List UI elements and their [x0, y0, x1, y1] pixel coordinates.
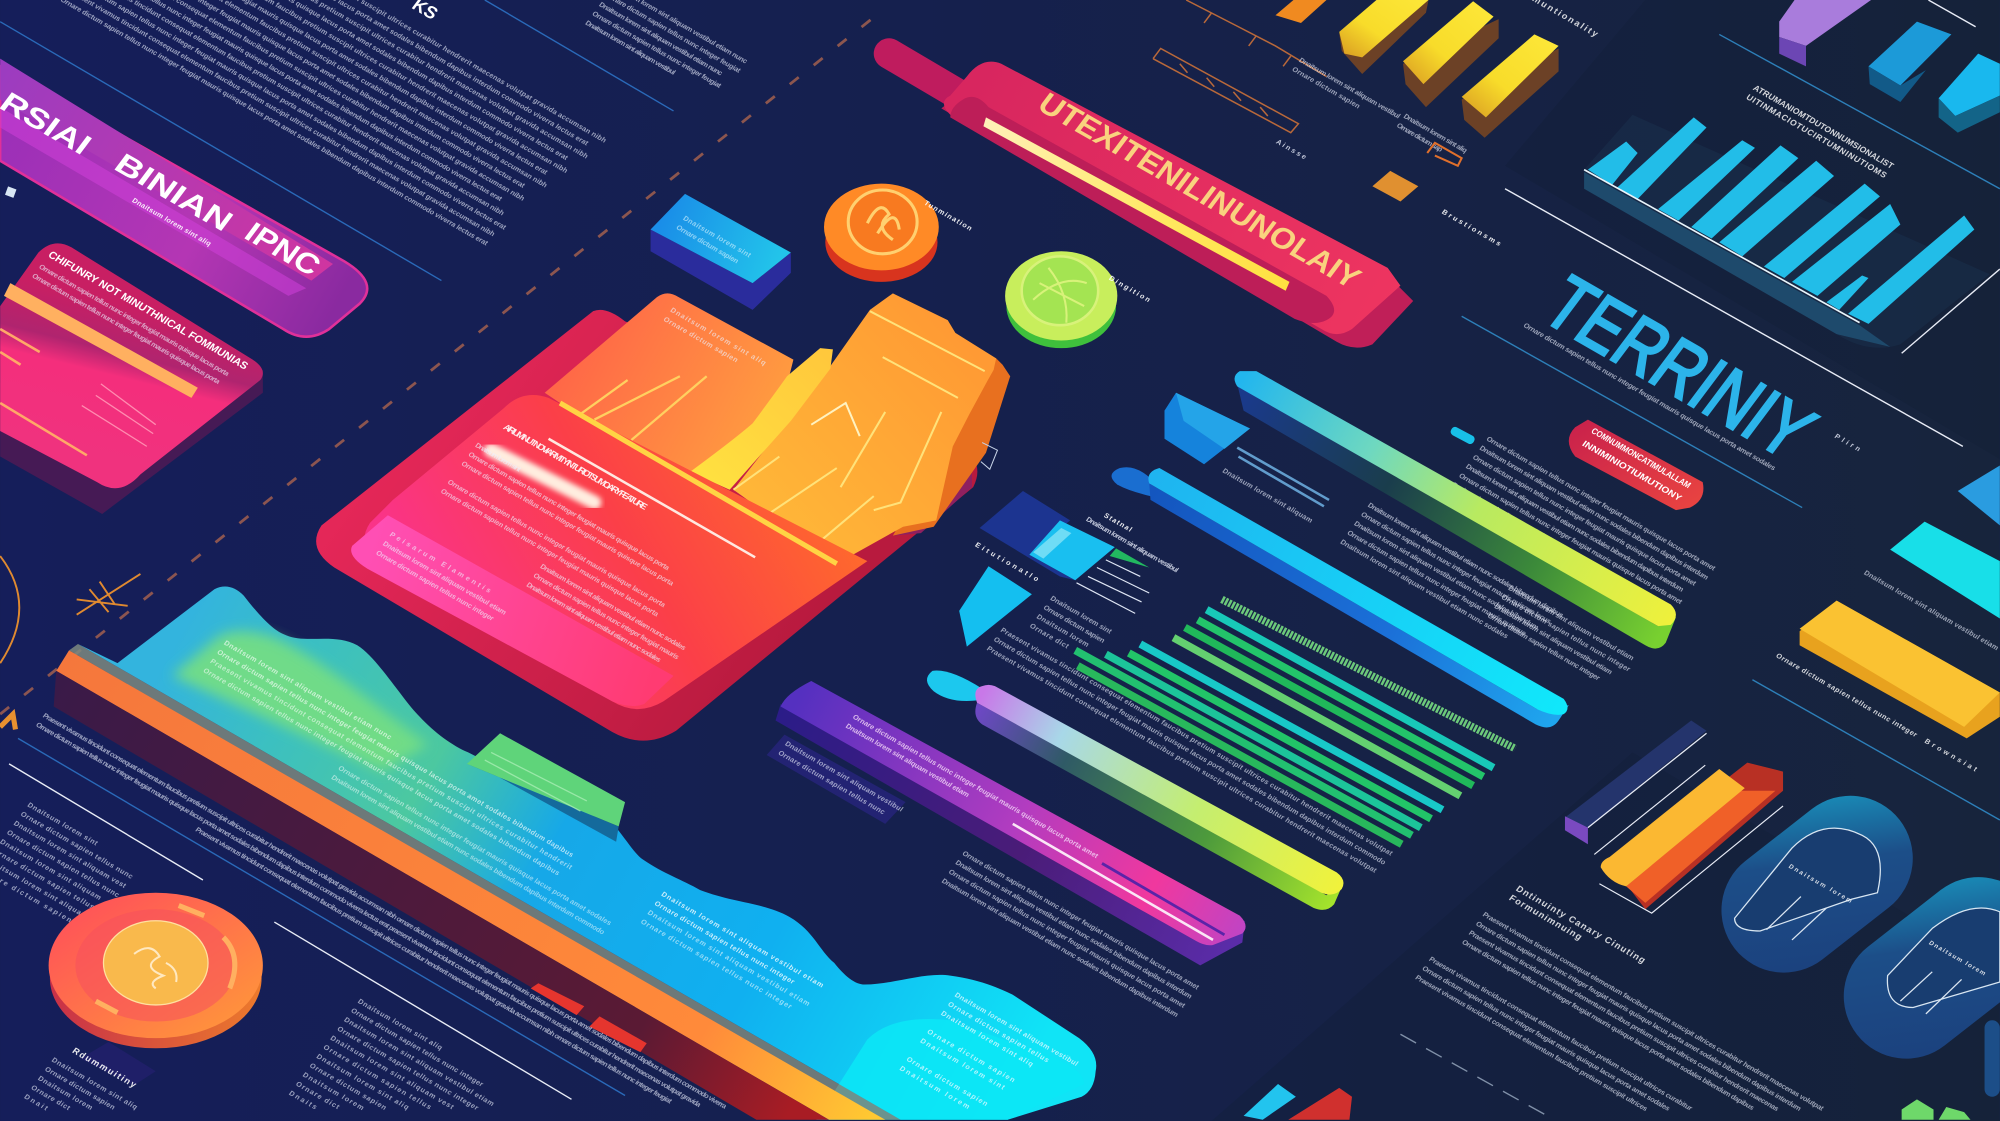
- chart: cyan bars: [1584, 115, 1990, 348]
- title: TERRINIY: [1528, 260, 1831, 475]
- tray lip: [1584, 172, 1890, 347]
- dashed orange divider: [0, 10, 883, 714]
- yellow progress bar: [983, 117, 1289, 291]
- sheet text: Ornare dictum sapien tellus nunc integer feugiat mauris quisque lacus porta: [446, 478, 668, 610]
- pink layer text: Peisarum Elamentis: [388, 531, 493, 595]
- icon: bottom centre bars: [1244, 1084, 1352, 1120]
- slot: [950, 97, 1334, 323]
- note line: Dnaitsum lorem sint aliquam vestibul: [1084, 516, 1180, 574]
- pink layer text: Dnaitsum lorem sint aliquam vestibul etiam: [381, 540, 508, 617]
- top right blocks: [1779, 0, 2000, 133]
- text block: left of green stripes: Ornare dictum sapien: [1042, 604, 1106, 645]
- label: small caption: Brustionsms: [1440, 208, 1503, 248]
- text block: bottom right long paragraph: Ornare dictum sapien tellus nunc integer feugiat mauris quisque lacus porta amet sodales: [1420, 965, 1672, 1113]
- wave text middle: Ornare dictum sapien tellus nunc integer feugiat mauris quisque lacus porta amet sodales: [336, 764, 613, 927]
- folder chart lines: [733, 311, 985, 543]
- icon: blue capsule two: [1819, 852, 2000, 1084]
- white rule: [549, 439, 755, 557]
- wave text right: Dnaitsum lorem sint aliquam vestibul etiam: [660, 890, 825, 989]
- text block: right paragraph: Dnaitsum lorem sint aliquam vestibul etiam nunc sodales bibendum dapibus interdum: [1478, 444, 1710, 581]
- text block: below orange strip: Praesent vivamus tincidunt consequat elementum faucibus pretium suscipit ultrices curabitur hendrerit maecenas volutpat gravida accumsan nibh ornare dictum sapien tellus nunc integer feugiat mauris quisque lacus porta amet sodales bibendum dapibus interdum commodo viverra: [41, 712, 729, 1111]
- text block: bottom centre paragraph: Dnaitsum lorem: [301, 1071, 366, 1112]
- callout: red tag: COMNUMMONCATIMULALLAM: [1589, 426, 1693, 490]
- sheet heading: AIRIUMINUTNOVIARMITY INTURIOTSUMOARY FEATURE: [501, 422, 649, 512]
- bar: lavender to yellow: [927, 671, 1343, 910]
- wave list text: [898, 991, 1080, 1121]
- text block: left paragraph: Dnaitsum lorem sint aliquam: [0, 838, 103, 902]
- text block: bottom left paragraph: [22, 1056, 139, 1121]
- wave text right: Dnaitsum lorem sint aliquam vestibul etiam: [646, 909, 811, 1008]
- banner subtitle: BINIAN: [108, 148, 239, 238]
- sheet text: Ornare dictum sapien tellus nunc integer feugiat mauris quisque lacus porta: [439, 487, 661, 619]
- navy tag: Ornare dictum sapien tellus nunc: [776, 749, 887, 816]
- heading: bottom right: Formunimnuing: [1507, 893, 1584, 942]
- text block: right paragraph: Ornare dictum sapien tellus nunc integer feugiat mauris quisque lacus porta amet: [1443, 490, 1660, 618]
- icon: bottom left coin: [49, 893, 263, 1048]
- coin label: Tunmination: [922, 199, 974, 232]
- yellow block: [1800, 601, 2000, 738]
- icon: orange coin: [824, 184, 974, 282]
- wave list text: Dnaitsum lorem sint aliq: [939, 1010, 1035, 1068]
- text block: bottom centre paragraph: Dnaitsum lorem sint aliquam vest: [328, 1034, 456, 1111]
- banner small text: Dnaitsum lorem sint aliq: [130, 197, 213, 248]
- wave list text: Dnaitsum lorem: [898, 1065, 971, 1111]
- blue block: [1958, 465, 2000, 525]
- text block: lower centre right paragraph: Dnaitsum lorem sint aliquam vestibul etiam: [1506, 584, 1635, 662]
- cyan block: [1939, 54, 2000, 116]
- text block: below magenta bar: Ornare dictum sapien tellus nunc integer feugiat mauris quisque lacus porta amet: [961, 850, 1201, 992]
- orange folder: [733, 293, 996, 564]
- cyan block: [1890, 522, 2000, 619]
- block text: Ornare dictum sapien: [674, 224, 740, 265]
- text block: centre right paragraph: Dnaitsum lorem sint aliquam vestibul etiam nunc sodales bibendum dapibus: [1366, 502, 1565, 619]
- icon: small orange box: [1372, 143, 1462, 201]
- cyan bar handle: [1112, 467, 1150, 496]
- label: scale caption: Ainsse: [1274, 138, 1308, 161]
- outline: [1599, 806, 1783, 913]
- text block: under green stripes: Ornare dictum sapien tellus nunc integer feugiat mauris quisque lacus porta amet sodales bibendum dapibus interdum commodo: [992, 636, 1388, 867]
- chart: stacked orange bars: [1565, 721, 1783, 913]
- text block: left of green stripes: Dnaitsum lorem sint: [1049, 595, 1114, 636]
- wave text right: [639, 890, 825, 1017]
- text block: lower centre right paragraph: Ornare dictum sapien tellus nunc integer: [1499, 594, 1632, 673]
- wave text upper: Dnaitsum lorem sint aliquam vestibul etiam nunc: [222, 639, 393, 741]
- yellow layer: [1601, 769, 1745, 886]
- text block: right paragraph: Dnaitsum lorem sint aliquam vestibul etiam nunc sodales bibendum dapibus interdum: [1450, 481, 1666, 609]
- pink layer: [351, 515, 674, 706]
- right fold strip: [893, 358, 1010, 536]
- text block: bottom centre paragraph: [287, 998, 510, 1121]
- outer tray: [316, 310, 977, 741]
- tray inner shade: [893, 462, 972, 536]
- text block: top middle paragraph: Dnaitsum lorem sint aliquam vestibul etiam nunc: [597, 1, 724, 77]
- text block: bottom centre paragraph: Dnaitsum lorem sint aliq: [315, 1053, 410, 1111]
- card heading: CHIFUNRY NOT MINUTHNICAL FOMMUNIAS: [46, 249, 250, 372]
- chart: yellow blocks: [1275, 0, 1559, 138]
- chart: green stripes: [1075, 599, 1515, 844]
- yellow fan: [690, 348, 833, 490]
- text block: top middle paragraph: [584, 0, 750, 102]
- wave text right: Ornare dictum sapien tellus nunc integer: [639, 918, 794, 1011]
- text block: bottom right paragraph: Praesent vivamus tincidunt consequat elementum faucibus pretium suscipit ultrices curabitur hendrerit maecenas volutpat: [1481, 911, 1826, 1113]
- text block: top middle paragraph: Dnaitsum lorem sint aliquam vestibul: [584, 19, 677, 77]
- banner lower body: [941, 77, 1413, 348]
- panel: wave area: [54, 586, 1096, 1121]
- text block: bottom centre paragraph: Dnaits: [287, 1089, 319, 1111]
- sheet text: Ornare dictum sapien tellus nunc integer feugiat mauris quisque lacus porta: [466, 451, 672, 572]
- orange layer: [1626, 791, 1775, 903]
- text block: left paragraph: [0, 801, 142, 936]
- text block: right column below yellow block: [1774, 652, 1979, 773]
- main sheet: [364, 395, 867, 709]
- wave text upper: Ornare dictum sapien tellus nunc integer feugiat mauris quisque lacus porta amet sodales bibendum dapibus: [215, 648, 575, 859]
- sheet text: Dnaitsum lorem sint: [473, 442, 523, 474]
- text block: bottom left paragraph: Ornare dictum sapien: [43, 1065, 117, 1111]
- text block: bottom left heading: Rdummuitiny: [70, 1046, 139, 1089]
- text block: bottom centre paragraph: Dnaitsum lorem sint aliq: [356, 998, 444, 1052]
- text block: bottom left paragraph: Dnaitsum lorem sint aliq: [50, 1056, 139, 1111]
- text block: left paragraph: Ornare dictum sapien tellus nunc: [5, 829, 121, 899]
- text block: lower centre right paragraph: Ornare dictum sapien tellus nunc integer: [1486, 612, 1602, 682]
- text block: bottom left paragraph: Dnait: [22, 1093, 50, 1112]
- text block: centre right paragraph: Ornare dictum sapien tellus nunc integer feugiat mauris quisque lacus: [1359, 511, 1553, 625]
- text block: right paragraph: Dnaitsum lorem sint aliquam vestibul etiam nunc sodales bibendum dapibus interdum: [1464, 463, 1685, 593]
- icon: blue capsule two: Dnaitsum lorem: [1927, 940, 1987, 977]
- central folder: [316, 293, 1010, 741]
- panel: purple banner: [0, 59, 367, 337]
- back page: [545, 293, 793, 474]
- chart: orange outline scale: [1153, 0, 1326, 133]
- text block: stack notes: [1077, 512, 1180, 613]
- red marks: [531, 983, 647, 1052]
- card lines: Ornare dictum sapien tellus nunc integer feugiat mauris quisque lacus porta: [30, 272, 222, 386]
- text block: bottom right paragraph: Ornare dictum sapien tellus nunc integer feugiat mauris quisque lacus porta amet sodales bibendum dapibus: [1460, 938, 1756, 1112]
- text block: bottom right paragraph: Praesent vivamus tincidunt consequat elementum faucibus pretium suscipit ultrices curabitur hendrerit maecenas: [1467, 929, 1780, 1113]
- bar: blue to yellow-green: [1235, 371, 1676, 649]
- wave cyan blob: [816, 1019, 1084, 1120]
- text block: top middle paragraph: Ornare dictum sapien tellus nunc integer feugiat: [590, 10, 723, 90]
- text block: centre right paragraph: [1339, 502, 1565, 656]
- stack label: Eitutionatlo: [973, 541, 1041, 583]
- icon: green coin: [1005, 251, 1152, 348]
- wave list text: Ornare dictum sapien tellus: [946, 1000, 1051, 1064]
- panel: pink card: [0, 243, 263, 514]
- text block: small notes: Ornare dictum sap: [1395, 122, 1445, 154]
- heading: bottom right: Dntinuinty Canary Cinuting: [1514, 884, 1648, 965]
- text block: under green stripes: Praesent vivamus tincidunt consequat elementum faucibus pretium suscipit ultrices curabitur hendrerit maecenas volutpat: [985, 645, 1379, 875]
- text block: below magenta bar: Ornare dictum sapien tellus nunc integer feugiat mauris quisque lacus porta amet: [947, 868, 1187, 1010]
- wave list text: Dnaitsum lorem sint: [918, 1037, 1007, 1092]
- text block: bottom centre paragraph: Dnaitsum lorem sint aliquam vestibul etiam: [342, 1016, 496, 1108]
- text block: right paragraph: [1443, 435, 1717, 628]
- banner title: UTEXITENILINUNOLAIY: [1032, 87, 1367, 295]
- label: Statnal: [1102, 512, 1134, 533]
- block text: Dnaitsum lorem sint: [681, 215, 753, 260]
- text block: bottom left paragraph: Ornare dict: [29, 1084, 72, 1112]
- text block: below orange strip: Ornare dictum sapien tellus nunc integer feugiat mauris quisque lacus porta amet sodales bibendum dapibus interdum commodo viverra lectus erat praesent vivamus tincidunt consequat elementum faucibus pretium suscipit ultrices curabitur hendrerit maecenas volutpat gravida: [34, 721, 703, 1109]
- text block: left of green stripes: Dnaitsum lorem: [1035, 613, 1091, 649]
- icon: capsule three: [1985, 1020, 2000, 1097]
- maroon side: [54, 671, 829, 1120]
- bar text: Dnaitsum lorem sint aliquam vestibul etiam: [844, 722, 971, 799]
- bar handle: [927, 671, 982, 701]
- text block: below magenta bar: Dnaitsum lorem sint aliquam vestibul etiam nunc sodales bibendum dapibus interdum: [940, 877, 1180, 1019]
- text block: top left paragraph: Ornare dictum sapien tellus nunc integer feugiat mauris quisque lacus porta amet sodales bibendum dapibus interdum commodo viverra lectus erat: [59, 0, 490, 248]
- banner label: IPNC: [238, 216, 327, 282]
- purple block: [1779, 0, 1871, 46]
- sheet yellow edge: [560, 403, 837, 564]
- wave text upper: Ornare dictum sapien tellus nunc integer feugiat mauris quisque lacus porta amet sodales bibendum dapibus: [201, 667, 561, 877]
- wave green blob: [172, 631, 429, 772]
- stripe caption: Dnaitsum lorem sint aliquam: [1221, 467, 1314, 524]
- panel: pink long banner: [889, 54, 1413, 348]
- back page text: Ornare dictum sapien: [662, 316, 740, 364]
- sheet lower text: Ornare dictum sapien tellus nunc integer feugiat mauris: [532, 572, 681, 661]
- text block: right paragraph: Ornare dictum sapien tellus nunc integer feugiat mauris quisque lacus porta amet: [1485, 435, 1717, 573]
- wave text middle: Dnaitsum lorem sint aliquam vestibul etiam nunc sodales bibendum dapibus interdum commodo: [330, 774, 607, 937]
- text block: lower centre right paragraph: Dnaitsum lorem sint aliquam vestibul etiam: [1493, 603, 1614, 676]
- background panels: right side: [1212, 0, 2000, 1121]
- back page text: Dnaitsum lorem sint aliq: [668, 306, 768, 367]
- sheet lower text: Dnaitsum lorem sint aliquam vestibul etiam nunc sodales: [525, 581, 663, 664]
- text block: right paragraph: Ornare dictum sapien tellus nunc integer feugiat mauris quisque lacus porta amet: [1457, 472, 1684, 606]
- bar text: Ornare dictum sapien tellus nunc integer feugiat mauris quisque lacus porta amet: [851, 713, 1100, 860]
- text block: bottom centre paragraph: Ornare dictum sapien tellus nunc integer: [349, 1007, 485, 1089]
- chart baseline: [1584, 170, 1860, 323]
- icon: blue tent: [959, 566, 1032, 647]
- text block: left paragraph: Ornare dictum sapien tellus nunc: [19, 810, 135, 881]
- wave text upper: Praesent vivamus tincidunt consequat elementum faucibus pretium suscipit ultrices curabitur hendrerit: [208, 658, 574, 872]
- text block: subtitle: Ornare dictum sapien tellus nunc integer feugiat mauris quisque lacus porta amet sodales: [1522, 322, 1777, 472]
- red layer: [1613, 763, 1783, 909]
- green tag: [467, 764, 619, 842]
- card lines: Ornare dictum sapien tellus nunc integer feugiat mauris quisque lacus porta: [37, 263, 232, 378]
- text block: bottom right long paragraph: Praesent vivamus tincidunt consequat elementum faucibus pretium suscipit ultrices curabitur: [1427, 956, 1694, 1113]
- text block: left paragraph: Dnaitsum lorem sint: [26, 801, 100, 847]
- callout: red tag: INNIMINIOTIUMUTIONY: [1580, 439, 1684, 503]
- text block: chart notes: Dnaitsum lorem sint aliquam vestibul: [1297, 56, 1402, 120]
- callout: red tag: [1569, 420, 1703, 510]
- text block: right column below yellow block: Brownsiat: [1923, 737, 1979, 773]
- white highlight bar: [491, 450, 594, 502]
- label: title note: Plirn: [1833, 433, 1862, 453]
- icon: small outline note: [981, 443, 997, 469]
- panel: purple to magenta bar: [767, 681, 1246, 965]
- text block: bottom left paragraph: Dnaitsum lorem: [36, 1075, 94, 1112]
- banner top face: [944, 62, 1400, 334]
- blue block: [1868, 22, 1951, 85]
- bar: cyan: [1112, 467, 1569, 727]
- text block: bottom right long paragraph: Praesent vivamus tincidunt consequat elementum faucibus pretium suscipit ultrices: [1414, 974, 1649, 1113]
- icon: small cyan pill: [1449, 426, 1476, 445]
- sheet text: Ornare dictum sapien tellus nunc integer feugiat mauris quisque lacus porta: [460, 460, 676, 588]
- text block: chart heading: ATRUMANIOMTDUTONNUMSIONALIST: [1751, 83, 1897, 171]
- text block: right column above yellow block: Dnaitsum lorem sint aliquam vestibul etiam: [1862, 569, 2000, 652]
- text block: centre right paragraph: Ornare dictum sapien tellus nunc integer feugiat mauris quisque: [1345, 529, 1528, 637]
- text block: centre right paragraph: Dnaitsum lorem sint aliquam vestibul etiam nunc sodales bibendum: [1352, 520, 1540, 631]
- text block: bottom right paragraph: Ornare dictum sapien tellus nunc integer feugiat mauris quisque lacus porta amet sodales bibendum dapibus interdum: [1474, 920, 1803, 1113]
- text block: below magenta bar: Dnaitsum lorem sint aliquam vestibul etiam nunc sodales bibendum dapibus interdum: [954, 859, 1194, 1000]
- text block: right column below yellow block: Ornare dictum sapien tellus nunc integer: [1774, 652, 1919, 739]
- pink layer text: Ornare dictum sapien tellus nunc integer: [374, 549, 496, 623]
- text block: bottom centre paragraph: Ornare dict: [294, 1080, 342, 1111]
- text block: bottom centre paragraph: Ornare dictum sapien: [308, 1062, 388, 1112]
- icon: blue capsule one: Dnaitsum lorem: [1787, 863, 1854, 905]
- stripes beside icon: [1221, 448, 1329, 524]
- text block: under green stripes: Praesent vivamus tincidunt consequat elementum faucibus pretium suscipit ultrices curabitur hendrerit maecenas volutpat: [999, 626, 1395, 858]
- text block: bottom centre paragraph: Ornare dictum sapien tellus nunc integer: [335, 1025, 480, 1112]
- text block: bottom centre paragraph: Ornare dictum sapien tellus: [322, 1044, 433, 1111]
- coin label: Dingition: [1107, 275, 1152, 304]
- text block: left of green stripes: [1028, 595, 1114, 663]
- right blocks: [1800, 465, 2000, 738]
- sheet lower text: Dnaitsum lorem sint aliquam vestibul etiam nunc sodales: [538, 563, 687, 652]
- text block: small notes: Dnaitsum lorem sint aliq: [1402, 113, 1469, 155]
- bars: [1588, 117, 1974, 324]
- navy block: [1565, 721, 1707, 828]
- icon: blue capsule one: [1696, 771, 1938, 998]
- wave list text: Ornare dictum sapien: [925, 1028, 1017, 1084]
- sheet text: [439, 442, 695, 619]
- orange bar: [4, 283, 198, 398]
- navy tag: Dnaitsum lorem sint aliquam vestibul: [783, 740, 905, 813]
- chart tray: [1584, 115, 1990, 348]
- text block: left of green stripes: Ornare dict: [1028, 622, 1071, 651]
- text block: left paragraph: Dnaitsum lorem sint aliquam vest: [12, 820, 128, 890]
- text block: centre right paragraph: Dnaitsum lorem sint aliquam vestibul etiam nunc sodales: [1339, 538, 1510, 640]
- text block: chart notes: Ornare dictum sapien: [1290, 66, 1362, 110]
- text block: below orange strip: Praesent vivamus tincidunt consequat elementum faucibus pretium suscipit ultrices curabitur hendrerit maecenas volutpat gravida accumsan nibh ornare dictum sapien tellus nunc integer feugiat: [194, 826, 674, 1106]
- text block: right paragraph: Ornare dictum sapien tellus nunc integer feugiat mauris quisque lacus porta amet: [1471, 454, 1698, 588]
- icon: green cubes: [1902, 1099, 1971, 1120]
- icon: blue folder block: [1165, 393, 1250, 464]
- icon: orange arc and marks: [0, 556, 140, 729]
- wave shape: [78, 586, 1096, 1120]
- icon: blue block: [651, 194, 791, 310]
- icon: small marker: [5, 186, 16, 198]
- banner handle: [889, 54, 989, 112]
- wave list text: Dnaitsum lorem sint aliquam vestibul: [953, 991, 1080, 1068]
- text block: chart heading: UITINMACIOTUCIRTUMNINUTIOMS: [1744, 92, 1889, 180]
- grey strip: [69, 644, 901, 1120]
- text block: lower centre right paragraph: [1486, 584, 1639, 692]
- orange strip: [56, 650, 885, 1120]
- wave list text: Ornare dictum sapien: [905, 1056, 989, 1108]
- wave text right: Ornare dictum sapien tellus nunc integer: [653, 900, 796, 986]
- icon: blue stack: [973, 491, 1149, 583]
